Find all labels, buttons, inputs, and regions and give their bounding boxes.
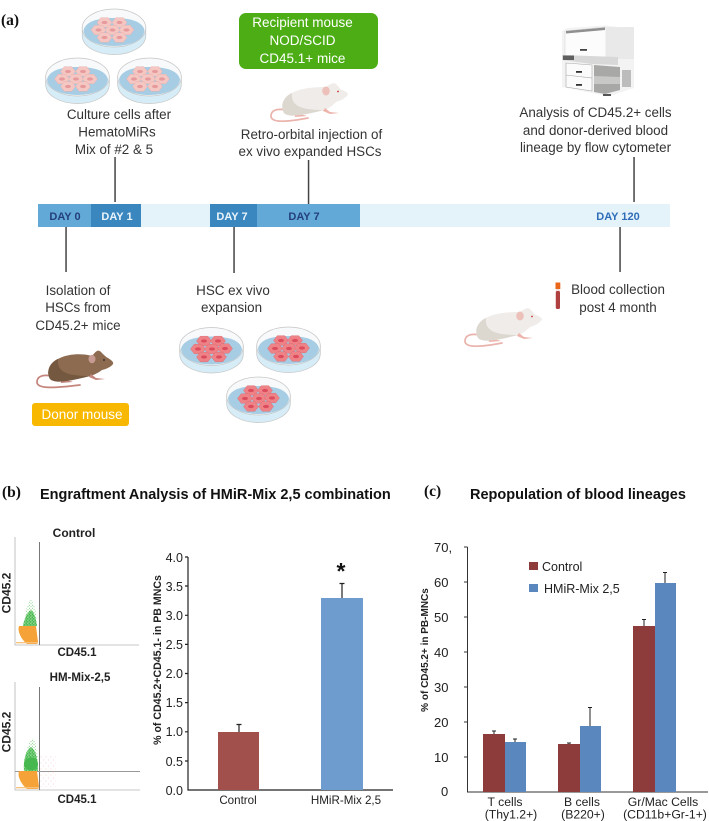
bar: control xyxy=(218,724,259,790)
x labels: HMiR-Mix 2,5 xyxy=(311,794,381,807)
connector: day 7 injection xyxy=(308,160,309,204)
y axis labels xyxy=(166,551,183,798)
heading: engraftment analysis: Engraftment Analysis of HMiR-Mix 2,5 combination xyxy=(40,487,391,503)
y axis labels: 0 xyxy=(441,784,448,799)
segment: day 7 injection: DAY 7 xyxy=(288,211,320,223)
connector: day 0 isolation xyxy=(65,227,67,272)
text: isolation of HSCs: CD45.2+ mice xyxy=(35,318,121,333)
text: isolation of HSCs: Isolation of xyxy=(46,283,111,298)
y axis labels: 20 xyxy=(434,715,448,730)
x labels: B cells xyxy=(564,795,600,809)
icon: expanded dishes red xyxy=(180,327,320,422)
panel: a timeline workflow xyxy=(1,9,672,426)
y axis labels: 50 xyxy=(434,610,448,625)
x labels: Control xyxy=(219,794,257,807)
text: analysis by flow cytometer: lineage by flow cytometer xyxy=(520,140,672,155)
y axis labels: 0.0 xyxy=(166,784,183,798)
panel: b engraftment analysis xyxy=(0,484,393,807)
bars: B cells xyxy=(558,726,601,792)
text: HSC ex vivo expansion: expansion xyxy=(201,300,262,315)
bars: T cells xyxy=(483,734,526,792)
legend xyxy=(529,560,620,596)
flow plot: HM-Mix-2,5 xyxy=(0,672,140,806)
connector: day 120 analysis xyxy=(633,157,635,202)
y axis labels: 70, xyxy=(434,540,452,555)
y axis labels: 3.0 xyxy=(166,609,183,623)
segment: day 7 expansion: DAY 7 xyxy=(216,211,248,223)
x labels: T cells xyxy=(488,795,522,809)
text: blood collection: post 4 month xyxy=(579,300,657,315)
y axis labels: 10 xyxy=(434,750,448,765)
text: culture cells after HematoMiRs: Culture cells after xyxy=(67,107,172,122)
y axis labels: 2.5 xyxy=(166,638,183,652)
icon: brown donor mouse xyxy=(37,351,113,387)
connector: day 1 xyxy=(114,157,116,202)
timeline bar xyxy=(38,204,670,227)
text: culture cells after HematoMiRs: HematoMiRs xyxy=(78,124,156,140)
panel letter b: (b) xyxy=(2,484,21,501)
y axis labels: 1.0 xyxy=(166,725,183,739)
segment: day 1 xyxy=(91,204,141,227)
icon: flow cytometer xyxy=(562,26,634,96)
icon: white mouse post collection xyxy=(465,308,542,346)
y axis labels: 1.5 xyxy=(166,696,183,710)
bar chart: lineages xyxy=(420,540,708,821)
heading: repopulation: Repopulation of blood lineages xyxy=(470,487,686,503)
y axis and ticks xyxy=(185,557,393,790)
segment: day 0 xyxy=(38,204,91,227)
x labels xyxy=(219,794,381,807)
y axis labels: 4.0 xyxy=(166,551,183,565)
y axis labels: 0.5 xyxy=(166,755,183,769)
icon: culture dishes pink xyxy=(46,9,181,104)
y axis labels: 3.5 xyxy=(166,580,183,594)
panel: c repopulation of blood lineages xyxy=(420,483,708,821)
callout: recipient mouse: NOD/SCID xyxy=(269,33,336,48)
axes xyxy=(464,547,708,792)
y axis title: % of CD45.2+CD45.1- in PB MNCs xyxy=(152,575,164,745)
text: analysis by flow cytometer: and donor-derived blood xyxy=(523,123,668,138)
y axis labels: 2.0 xyxy=(166,667,183,681)
icon: white recipient mouse xyxy=(271,83,348,121)
text: culture cells after HematoMiRs: Mix of #2 & 5 xyxy=(75,142,153,157)
segment: day 1: DAY 1 xyxy=(101,211,133,223)
callout: recipient mouse: CD45.1+ mice xyxy=(260,51,345,66)
error bars xyxy=(492,572,667,744)
flow plot: control: CD45.1 xyxy=(58,647,97,659)
flow plot: HM-Mix-2,5: CD45.1 xyxy=(58,794,97,806)
bar chart: engraftment xyxy=(152,551,393,807)
text: isolation of HSCs: HSCs from xyxy=(45,300,111,315)
callout: recipient mouse: Recipient mouse xyxy=(252,15,353,30)
legend: Control xyxy=(542,560,582,574)
legend: HMiR-Mix 2,5 xyxy=(544,582,620,596)
flow plot: control: Control xyxy=(53,526,95,540)
panel letter c: (c) xyxy=(424,483,441,500)
connector: blood collection xyxy=(619,227,621,272)
segment: day 0: DAY 0 xyxy=(49,211,81,223)
panel letter a: (a) xyxy=(1,12,19,29)
y axis title: % of CD45.2+ in PB-MNCs xyxy=(420,588,431,712)
significance star: * xyxy=(337,558,346,584)
text: HSC ex vivo expansion: HSC ex vivo xyxy=(196,283,270,298)
text: analysis by flow cytometer: Analysis of CD45.2+ cells xyxy=(519,105,672,120)
text: retro-orbital injection: ex vivo expanded HSCs xyxy=(239,144,382,159)
y axis labels: 40 xyxy=(434,645,448,660)
text: retro-orbital injection: Retro-orbital injection of xyxy=(241,127,382,142)
flow plot: HM-Mix-2,5: HM-Mix-2,5 xyxy=(50,672,111,684)
text: blood collection: Blood collection xyxy=(571,282,665,297)
y axis labels: 60 xyxy=(434,575,448,590)
callout: recipient mouse xyxy=(239,13,378,69)
callout: donor mouse xyxy=(32,403,129,426)
segment: day 120: DAY 120 xyxy=(596,211,640,223)
callout: donor mouse: Donor mouse xyxy=(41,407,123,422)
y axis labels xyxy=(434,540,452,799)
segment: day 7 expansion xyxy=(210,204,257,227)
y axis labels: 30 xyxy=(434,680,448,695)
x labels xyxy=(485,795,707,821)
icon: blood tube xyxy=(556,282,560,309)
bar: HMiR-Mix 2,5 xyxy=(321,584,363,790)
segment: day 7 injection xyxy=(257,204,360,227)
bars: Gr/Mac cells xyxy=(633,583,676,792)
connector: day 7 expansion xyxy=(233,227,235,273)
flow plot: control xyxy=(0,526,139,659)
x labels: Gr/Mac Cells xyxy=(628,795,698,809)
